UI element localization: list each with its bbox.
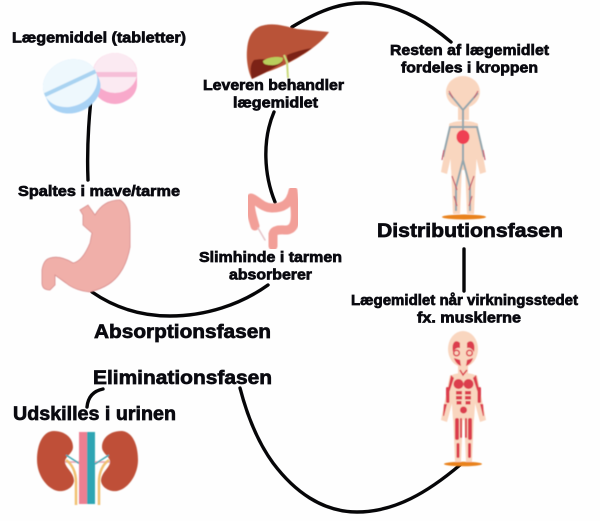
arrow: stomach to intestine (92, 285, 268, 316)
icon: liver (247, 24, 329, 79)
icon: tablets (35, 51, 137, 122)
arrow: tablets to stomach (88, 104, 90, 180)
label: Leveren: Leveren behandler (203, 77, 344, 94)
heading: Lægemiddel: Lægemiddel (tabletter) (12, 30, 186, 46)
label: Resten: fordeles i kroppen (401, 60, 538, 76)
arrow: target site to elimination (240, 388, 460, 512)
heading: Absorptionsfasen: Absorptionsfasen (94, 321, 271, 343)
icon: intestine (250, 191, 295, 246)
arrow: distribution to target site (462, 249, 466, 291)
label: Resten (390, 42, 549, 76)
label: Lægemidlet når: Lægemidlet når virkningsstedet (351, 292, 578, 309)
label: Leveren (203, 77, 344, 112)
icon: body with muscles (441, 331, 486, 466)
icon: stomach (42, 200, 130, 292)
arrow: intestine to liver (266, 112, 275, 202)
heading: Distributionsfasen: Distributionsfasen (377, 220, 563, 242)
heading: Udskilles: Udskilles i urinen (13, 403, 176, 425)
heading: Eliminationsfasen: Eliminationsfasen (93, 367, 272, 389)
label: Resten: Resten af lægemidlet (390, 42, 549, 59)
label: Spaltes: Spaltes i mave/tarme (18, 183, 180, 200)
label: Lægemidlet når: fx. musklerne (417, 310, 521, 326)
arrow: liver to distribution (292, 3, 451, 42)
label: Leveren: lægemidlet (233, 94, 318, 112)
label: Slimhinde (199, 249, 342, 284)
label: Slimhinde: absorberer (229, 266, 312, 284)
arrow: elimination to urine (87, 389, 103, 407)
icon: kidneys (37, 431, 138, 505)
icon: body with blood vessels (441, 76, 486, 220)
label: Slimhinde: Slimhinde i tarmen (199, 249, 342, 266)
label: Lægemidlet når (351, 292, 578, 326)
